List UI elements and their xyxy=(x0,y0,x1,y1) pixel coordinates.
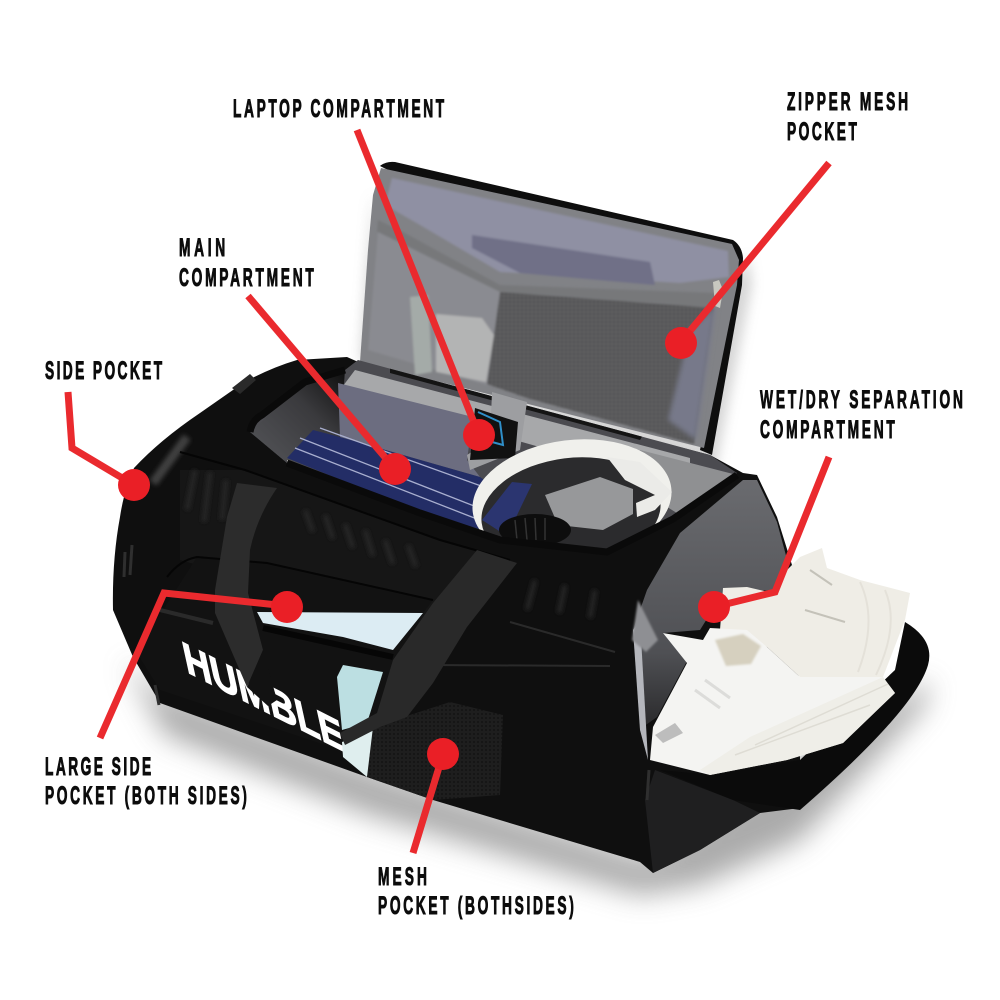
lid shadow xyxy=(360,190,752,470)
white bowl and camera xyxy=(472,439,672,548)
label: zipper mesh pocket: ZIPPER MESH xyxy=(787,89,908,116)
strap tail over brand text xyxy=(247,650,277,706)
label: large side pocket: LARGE SIDE xyxy=(45,754,151,781)
label: wet/dry separation compartment: COMPARTMENT xyxy=(760,417,895,444)
label: mesh pocket: POCKET (BOTHSIDES) xyxy=(378,893,574,920)
leader: main compartment xyxy=(248,296,411,485)
label: laptop compartment: LAPTOP COMPARTMENT xyxy=(233,96,445,123)
left handle strap xyxy=(215,483,277,687)
mesh pocket xyxy=(367,702,503,800)
label: wet/dry separation compartment xyxy=(760,387,963,444)
towel xyxy=(257,612,423,650)
mint card xyxy=(337,665,383,730)
back sneaker xyxy=(720,548,910,677)
label: zipper mesh pocket: POCKET xyxy=(787,119,857,146)
front handle strap xyxy=(340,550,517,745)
white panel xyxy=(342,728,380,777)
bag: wet/dry compartment interior xyxy=(632,480,788,760)
front sneaker xyxy=(650,628,895,775)
infographic: duffel bag features xyxy=(45,92,962,920)
leader: mesh pocket xyxy=(413,738,459,853)
label: large side pocket: POCKET (BOTH SIDES) xyxy=(45,783,247,810)
leader: side pocket xyxy=(68,392,150,501)
brand text: HUMBLE xyxy=(178,632,349,763)
lower right body under flap xyxy=(645,770,760,873)
drop shadow xyxy=(125,660,930,895)
shoe compartment flap xyxy=(660,622,929,810)
large side pocket xyxy=(135,557,433,777)
leader: large side pocket xyxy=(100,591,303,738)
main compartment interior xyxy=(250,360,737,530)
label: main compartment: MAIN xyxy=(179,235,225,262)
white sneakers xyxy=(650,548,910,775)
leader: laptop compartment xyxy=(357,130,495,451)
label: main compartment xyxy=(179,235,314,292)
laptop tag xyxy=(467,392,527,470)
leader: wet/dry compartment xyxy=(698,457,829,623)
bag: open lid with zipper mesh pocket xyxy=(360,162,743,455)
side zippers xyxy=(124,545,649,800)
label: mesh pocket: MESH xyxy=(378,864,427,891)
bag: main body silhouette xyxy=(113,357,800,873)
label: side pocket: SIDE POCKET xyxy=(45,358,163,385)
label: main compartment: COMPARTMENT xyxy=(179,265,314,292)
leader: zipper mesh pocket xyxy=(665,163,829,359)
label: wet/dry separation compartment: WET/DRY SEPARATION xyxy=(760,387,963,414)
label: mesh pocket xyxy=(378,864,574,920)
label: large side pocket xyxy=(45,754,247,810)
main compartment rim xyxy=(250,370,737,552)
label: zipper mesh pocket xyxy=(787,89,908,146)
bag: top panel with wrinkles xyxy=(153,374,615,666)
